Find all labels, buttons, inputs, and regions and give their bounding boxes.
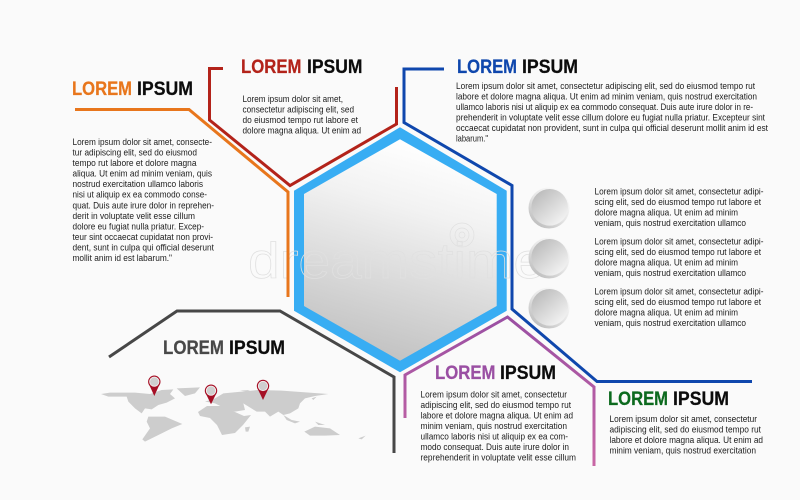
- orange body text: aliqua. Ut enim ad minim veniam, quis: [72, 169, 212, 179]
- green body text: Lorem ipsum dolor sit amet, consectetur: [610, 414, 757, 424]
- green body text: [610, 414, 763, 456]
- orange connector line: [75, 110, 288, 297]
- panel: green section: [608, 388, 763, 456]
- red body text: [242, 94, 361, 136]
- blue connector line: [404, 69, 752, 382]
- bullet text 1: dolore magna aliqua. Ut enim ad minim: [594, 208, 738, 218]
- bullet text 1: scing elit, sed do eiusmod tempo rut labore et: [594, 197, 761, 207]
- orange body text: [72, 137, 214, 263]
- purple body text: [420, 390, 576, 462]
- icon: circle 1: [528, 188, 570, 228]
- purple heading: IPSUM: [500, 362, 556, 384]
- icon: map pin 3: [257, 380, 269, 400]
- green heading: LOREM: [608, 388, 668, 410]
- blue body text: Lorem ipsum dolor sit amet, consectetur adipiscing elit, sed do eiusmod tempo rut: [456, 81, 755, 91]
- purple body text: Lorem ipsum dolor sit amet, consectetur: [420, 390, 567, 400]
- panel: purple section: [405, 317, 594, 466]
- red body text: do eiusmod tempo rut labore et: [242, 115, 358, 125]
- green body text: adipiscing elit, sed do eiusmod tempo rut: [610, 424, 761, 434]
- red body text: consectetur adipiscing elit, sed: [242, 104, 354, 114]
- blue body text: prehenderit in voluptate velit esse cillum dolore eu fugiat nulla priatur. Excepteur sint: [456, 112, 765, 122]
- blue heading: IPSUM: [522, 56, 578, 78]
- bullet text 3: veniam, quis nostrud exercitation ullamco: [594, 318, 746, 328]
- purple heading: LOREM: [435, 362, 496, 384]
- bullet text 3: Lorem ipsum dolor sit amet, consectetur adipi-: [594, 287, 764, 297]
- icon: map pin 1: [148, 376, 160, 396]
- blue body text: labore et dolore magna aliqua. Ut enim ad minim veniam, quis nostrud exercitation: [456, 92, 757, 102]
- orange body text: tur adipiscing elit, sed do eiusmod: [72, 148, 197, 158]
- orange heading: [72, 78, 193, 100]
- blue body text: [456, 81, 768, 144]
- purple body text: minim veniam, quis nostrud exercitation: [420, 421, 567, 431]
- orange body text: Lorem ipsum dolor sit amet, consecte-: [72, 137, 212, 147]
- icon: map pin 2: [205, 384, 217, 404]
- orange body text: nostrud exercitation ullamco laboris: [72, 179, 203, 189]
- watermark: dreamstime: [248, 233, 545, 289]
- blue body text: ullamco laboris nisi ut aliquip ex ea commodo consequat. Duis aute irure dolor in re-: [456, 102, 753, 112]
- red heading: LOREM: [241, 56, 302, 78]
- blue body text: labarum.": [456, 134, 488, 144]
- icon: circle 2: [528, 238, 570, 278]
- icon: circle 3: [528, 288, 570, 328]
- panel: red section: [210, 56, 396, 186]
- orange body text: quat. Duis aute irure dolor in reprehen-: [72, 200, 214, 210]
- orange body text: derit in voluptate velit esse cillum: [72, 211, 195, 221]
- bullet text 3: dolore magna aliqua. Ut enim ad minim: [594, 308, 738, 318]
- bullet text 1: Lorem ipsum dolor sit amet, consectetur adipi-: [594, 186, 764, 196]
- bullet text 3: scing elit, sed do eiusmod tempo rut labore et: [594, 297, 761, 307]
- panel: bullet list: [528, 186, 764, 328]
- blue body text: occaecat cupidatat non provident, sunt in culpa qui official deserunt mollit anim id est: [456, 123, 768, 133]
- green body text: labore et dolore magna aliqua. Ut enim ad: [610, 435, 763, 445]
- red heading: IPSUM: [307, 56, 362, 78]
- red body text: Lorem ipsum dolor sit amet,: [242, 94, 343, 104]
- orange body text: nisi ut aliquip ex ea commodo conse-: [72, 190, 207, 200]
- bullet text 1: veniam, quis nostrud exercitation ullamco: [594, 218, 746, 228]
- orange body text: dolore eu fugiat nulla priatur. Excep-: [72, 221, 204, 231]
- purple body text: reprehenderit in voluptate velit esse cillum: [420, 452, 576, 462]
- gray heading: LOREM: [163, 337, 224, 359]
- gray heading: IPSUM: [229, 337, 285, 359]
- panel: blue section: [404, 56, 768, 382]
- blue heading: LOREM: [457, 56, 517, 78]
- blue heading: [457, 56, 578, 78]
- purple connector line: [405, 317, 594, 466]
- panel: map section: [101, 311, 394, 453]
- bullet text 2: [594, 237, 764, 278]
- orange body text: mollit anim id est labarum.": [72, 253, 172, 263]
- purple body text: adipiscing elit, sed do eiusmod tempo rut: [420, 400, 571, 410]
- bullet text 2: dolore magna aliqua. Ut enim ad minim: [594, 258, 738, 268]
- green heading: [608, 388, 729, 410]
- orange heading: LOREM: [72, 78, 132, 100]
- purple body text: ullamco laboris nisi ut aliquip ex ea com-: [420, 432, 568, 442]
- bullet text 2: scing elit, sed do eiusmod tempo rut labore et: [594, 247, 761, 257]
- bullet text 2: veniam, quis nostrud exercitation ullamco: [594, 268, 746, 278]
- green heading: IPSUM: [673, 388, 729, 410]
- red body text: dolore magna aliqua. Ut enim ad: [242, 126, 361, 136]
- gray connector line: [109, 311, 394, 453]
- purple heading: [435, 362, 556, 384]
- bullet text 2: Lorem ipsum dolor sit amet, consectetur adipi-: [594, 237, 764, 247]
- red connector line: [210, 68, 396, 186]
- orange body text: teur sint occaecat cupidatat non provi-: [72, 232, 213, 242]
- purple body text: labore et dolore magna aliqua. Ut enim ad: [420, 410, 573, 420]
- world map: [101, 387, 366, 442]
- orange body text: tempo rut labore et dolore magna: [72, 158, 196, 168]
- panel: orange section: [72, 78, 288, 297]
- orange body text: dent, sunt in culpa qui official deserunt: [72, 242, 214, 252]
- bullet text 3: [594, 287, 764, 328]
- bullet text 1: [594, 186, 764, 228]
- purple body text: modo consequat. Duis aute irure dolor in: [420, 442, 569, 452]
- green body text: minim veniam, quis nostrud exercitation: [610, 446, 756, 456]
- gray heading: [163, 337, 285, 359]
- orange heading: IPSUM: [137, 78, 193, 100]
- central hexagon: [294, 127, 507, 372]
- red heading: [241, 56, 362, 78]
